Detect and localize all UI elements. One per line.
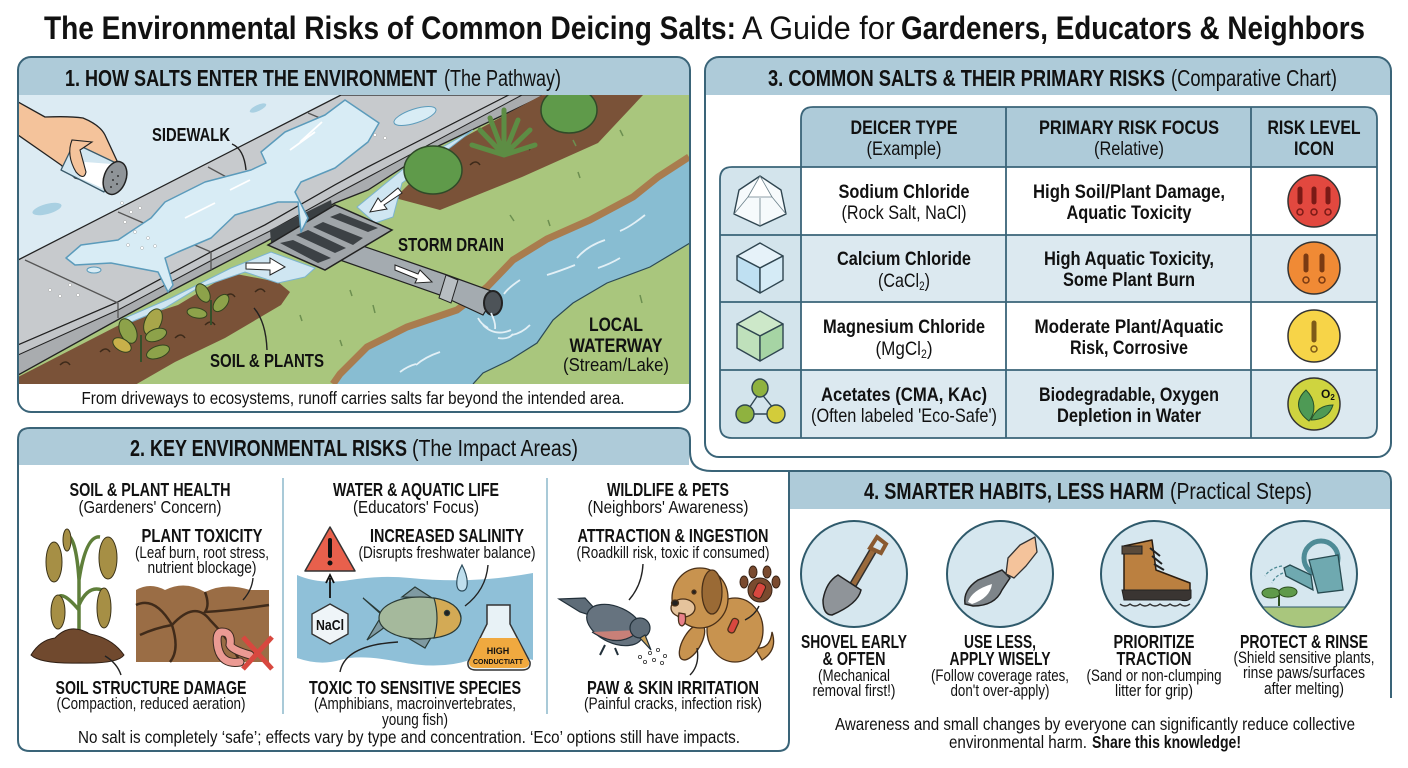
- column: soil and plant health: [31, 480, 272, 713]
- pipe: [340, 245, 497, 315]
- icon: rock salt crystal: [734, 176, 786, 226]
- row: calcium chloride: (CaCl: [878, 270, 928, 292]
- title: [44, 10, 1365, 46]
- icon: puppy: [671, 568, 774, 664]
- label: rinse paws/surfaces: [1243, 664, 1365, 682]
- label: storm drain: STORM DRAIN: [398, 235, 504, 255]
- label: soil and plants: SOIL & PLANTS: [210, 351, 324, 371]
- row: acetates: Biodegradable, Oxygen: [1039, 384, 1219, 406]
- label: toxic to sensitive species: (Amphibians, macroinvertebrates,: [314, 695, 516, 713]
- heading: panel 1: 1. HOW SALTS ENTER THE ENVIRONMENT: [65, 65, 437, 91]
- row: sodium chloride: (Rock Salt, NaCl): [842, 202, 966, 224]
- heading: panel 3: (Comparative Chart): [1171, 65, 1337, 91]
- row: sodium chloride: [838, 181, 1225, 224]
- row: calcium chloride: Calcium Chloride: [837, 248, 971, 270]
- label: attraction and ingestion: ATTRACTION & INGESTION: [578, 526, 768, 546]
- column heading: [70, 480, 230, 517]
- table header: RISK LEVEL: [1268, 117, 1361, 139]
- icon: oxygen leaf: 2: [1330, 393, 1335, 402]
- column heading: (Neighbors' Awareness): [588, 497, 748, 517]
- illustration: salt runoff pathway: [18, 87, 690, 385]
- column: water and aquatic life: [297, 480, 536, 729]
- runoff water on sidewalk: [66, 100, 379, 292]
- icon: high risk, two marks: [1288, 242, 1340, 294]
- row: acetates: [811, 384, 1219, 427]
- label: PROTECT & RINSE: [1240, 632, 1368, 652]
- label: [1086, 632, 1222, 700]
- icon: magnesium chloride cube: [737, 311, 783, 361]
- row: sodium chloride: Sodium Chloride: [838, 181, 970, 203]
- column: wildlife and pets: [559, 480, 780, 713]
- row: magnesium chloride: Moderate Plant/Aquatic: [1034, 316, 1224, 338]
- panel: key environmental risks: [18, 428, 789, 751]
- icon: oxygen leaf: O: [1321, 387, 1330, 401]
- heading: panel 1: (The Pathway): [444, 65, 561, 91]
- heading: panel 2: 2. KEY ENVIRONMENTAL RISKS: [130, 435, 407, 461]
- label: (Shield sensitive plants,: [1234, 649, 1374, 667]
- label: toxic to sensitive species: TOXIC TO SENSITIVE SPECIES: [309, 678, 521, 698]
- label: paw and skin irritation: (Painful cracks, infection risk): [584, 695, 762, 713]
- title: A Guide for: [742, 10, 895, 46]
- table header: (Example): [866, 138, 942, 160]
- label: attraction and ingestion: (Roadkill risk, toxic if consumed): [576, 544, 770, 562]
- column heading: (Gardeners' Concern): [78, 497, 222, 517]
- label: after melting): [1264, 680, 1344, 698]
- label: [801, 632, 907, 700]
- label: USE LESS,: [964, 632, 1036, 652]
- column heading: SOIL & PLANT HEALTH: [70, 480, 230, 500]
- label: plant toxicity: (Leaf burn, root stress,: [135, 544, 269, 562]
- panel: common salts and their primary risks: [705, 57, 1391, 457]
- label: plant toxicity: PLANT TOXICITY: [142, 526, 262, 546]
- row: magnesium chloride: ): [927, 338, 932, 360]
- caption: panel 1: From driveways to ecosystems, runoff carries salts far beyond the intended area.: [82, 388, 624, 408]
- row: calcium chloride: High Aquatic Toxicity,: [1044, 248, 1214, 270]
- panel: smarter habits, less harm: [18, 428, 1391, 752]
- flow arrows: [246, 188, 432, 283]
- label: toxic to sensitive species: [309, 678, 521, 729]
- icon: bird pecking salt: [559, 596, 651, 655]
- column heading: WATER & AQUATIC LIFE: [333, 480, 499, 500]
- icon: warning triangle: [305, 527, 355, 571]
- runoff water on ground: [125, 252, 315, 322]
- label: sidewalk: SIDEWALK: [152, 125, 230, 145]
- row: calcium chloride: Some Plant Burn: [1063, 269, 1195, 291]
- panel: how salts enter the environment: [18, 57, 690, 412]
- icon: oxygen leaf: [1288, 378, 1340, 430]
- icon: calcium chloride cube: [737, 243, 783, 293]
- plants and bushes: [110, 87, 597, 362]
- comparison table: [720, 107, 1377, 438]
- closing message: environmental harm.: [949, 732, 1087, 752]
- row: acetates: (Often labeled 'Eco-Safe'): [811, 405, 997, 427]
- icon: moderate risk, one mark: [1288, 310, 1340, 362]
- icon: high risk, three marks: [1288, 175, 1340, 227]
- label: local waterway: LOCAL: [589, 314, 643, 336]
- stream: [333, 160, 690, 384]
- label: plant toxicity: nutrient blockage): [148, 559, 256, 577]
- label: attraction and ingestion: [576, 526, 770, 562]
- label: plant toxicity: [135, 526, 269, 577]
- label: (Sand or non-clumping: [1086, 667, 1222, 685]
- heading: panel 2: (The Impact Areas): [412, 435, 578, 461]
- icon: fish: [363, 587, 461, 648]
- label: don't over-apply): [950, 682, 1050, 700]
- icon: NaCl crystal: NaCl: [316, 617, 344, 634]
- icon: NaCl crystal: [312, 604, 348, 644]
- title: The Environmental Risks of Common Deicing Salts:: [44, 10, 736, 46]
- icon: flask, high conductivity: HIGH: [487, 646, 509, 656]
- table header: (Relative): [1094, 138, 1164, 160]
- heading: panel 4: (Practical Steps): [1170, 478, 1312, 504]
- label: APPLY WISELY: [950, 649, 1050, 669]
- icon: hand with salt shaker: [18, 102, 386, 298]
- soil beds: [18, 273, 290, 385]
- closing message: [835, 714, 1355, 752]
- step: prioritize traction: [1086, 521, 1222, 700]
- table header: DEICER TYPE: [850, 117, 958, 139]
- label: increased salinity: [358, 526, 536, 562]
- column heading: [333, 480, 499, 517]
- icon: flask, high conductivity: CONDUCTIATT: [473, 657, 523, 666]
- row: calcium chloride: 2: [919, 279, 925, 293]
- label: removal first!): [812, 682, 896, 700]
- label: [1234, 632, 1374, 698]
- caption: panel 2: No salt is completely ‘safe’; effects vary by type and concentration. ‘Eco’ options still have impacts.: [78, 727, 740, 747]
- heading: panel 3: 3. COMMON SALTS & THEIR PRIMARY RISKS: [768, 65, 1165, 91]
- label: soil structure damage: SOIL STRUCTURE DAMAGE: [56, 678, 246, 698]
- label: toxic to sensitive species: young fish): [382, 711, 448, 729]
- column heading: (Educators' Focus): [353, 497, 479, 517]
- label: litter for grip): [1115, 682, 1193, 700]
- storm drain grate: [268, 205, 392, 270]
- step: use less: [931, 521, 1069, 700]
- label: increased salinity: INCREASED SALINITY: [370, 526, 524, 546]
- icon: water drop: [457, 565, 467, 591]
- row: calcium chloride: [837, 248, 1214, 293]
- label: SHOVEL EARLY: [801, 632, 907, 652]
- row: calcium chloride: ): [925, 270, 930, 292]
- step: shovel early: [801, 521, 907, 700]
- table header: [850, 117, 1361, 160]
- label: paw and skin irritation: PAW & SKIN IRRITATION: [587, 678, 759, 698]
- row: magnesium chloride: Magnesium Chloride: [823, 316, 985, 338]
- illustration: water band: [297, 573, 533, 666]
- step: protect and rinse: [1234, 521, 1374, 698]
- leader lines: [232, 144, 267, 350]
- label: PRIORITIZE: [1114, 632, 1194, 652]
- label: [931, 632, 1069, 700]
- label: & OFTEN: [822, 649, 886, 669]
- label: local waterway: [563, 314, 669, 375]
- label: TRACTION: [1116, 649, 1192, 669]
- closing message: Share this knowledge!: [1092, 732, 1241, 752]
- row: sodium chloride: Aquatic Toxicity: [1066, 202, 1192, 224]
- row: sodium chloride: High Soil/Plant Damage,: [1033, 181, 1225, 203]
- label: paw and skin irritation: [584, 678, 762, 713]
- icon: injured paw: [740, 566, 780, 602]
- row: acetates: Acetates (CMA, KAc): [821, 384, 987, 406]
- row: magnesium chloride: 2: [921, 347, 927, 361]
- sidewalk: [18, 95, 509, 345]
- label: (Follow coverage rates,: [931, 667, 1069, 685]
- table header: PRIMARY RISK FOCUS: [1039, 117, 1219, 139]
- label: soil structure damage: (Compaction, reduced aeration): [56, 695, 246, 713]
- label: soil structure damage: [56, 678, 246, 713]
- row: magnesium chloride: (MgCl: [876, 338, 928, 360]
- label: (Mechanical: [818, 667, 890, 685]
- label: increased salinity: (Disrupts freshwater balance): [358, 544, 536, 562]
- column heading: [588, 480, 748, 517]
- row: acetates: Depletion in Water: [1057, 405, 1201, 427]
- icon: acetate molecule: [736, 379, 785, 423]
- illustration: cracked soil and worm: [136, 585, 272, 669]
- salt grains: [638, 648, 667, 665]
- icon: flask, high conductivity: [468, 605, 530, 670]
- label: local waterway: (Stream/Lake): [563, 355, 669, 375]
- heading: panel 4: 4. SMARTER HABITS, LESS HARM: [864, 478, 1164, 504]
- curb inlet: [270, 200, 333, 243]
- row: magnesium chloride: Risk, Corrosive: [1070, 337, 1188, 359]
- label: local waterway: WATERWAY: [570, 335, 662, 357]
- icon: wilting plant: [31, 529, 124, 663]
- column heading: WILDLIFE & PETS: [607, 480, 729, 500]
- table header: ICON: [1294, 138, 1334, 160]
- row: magnesium chloride: [823, 316, 1224, 361]
